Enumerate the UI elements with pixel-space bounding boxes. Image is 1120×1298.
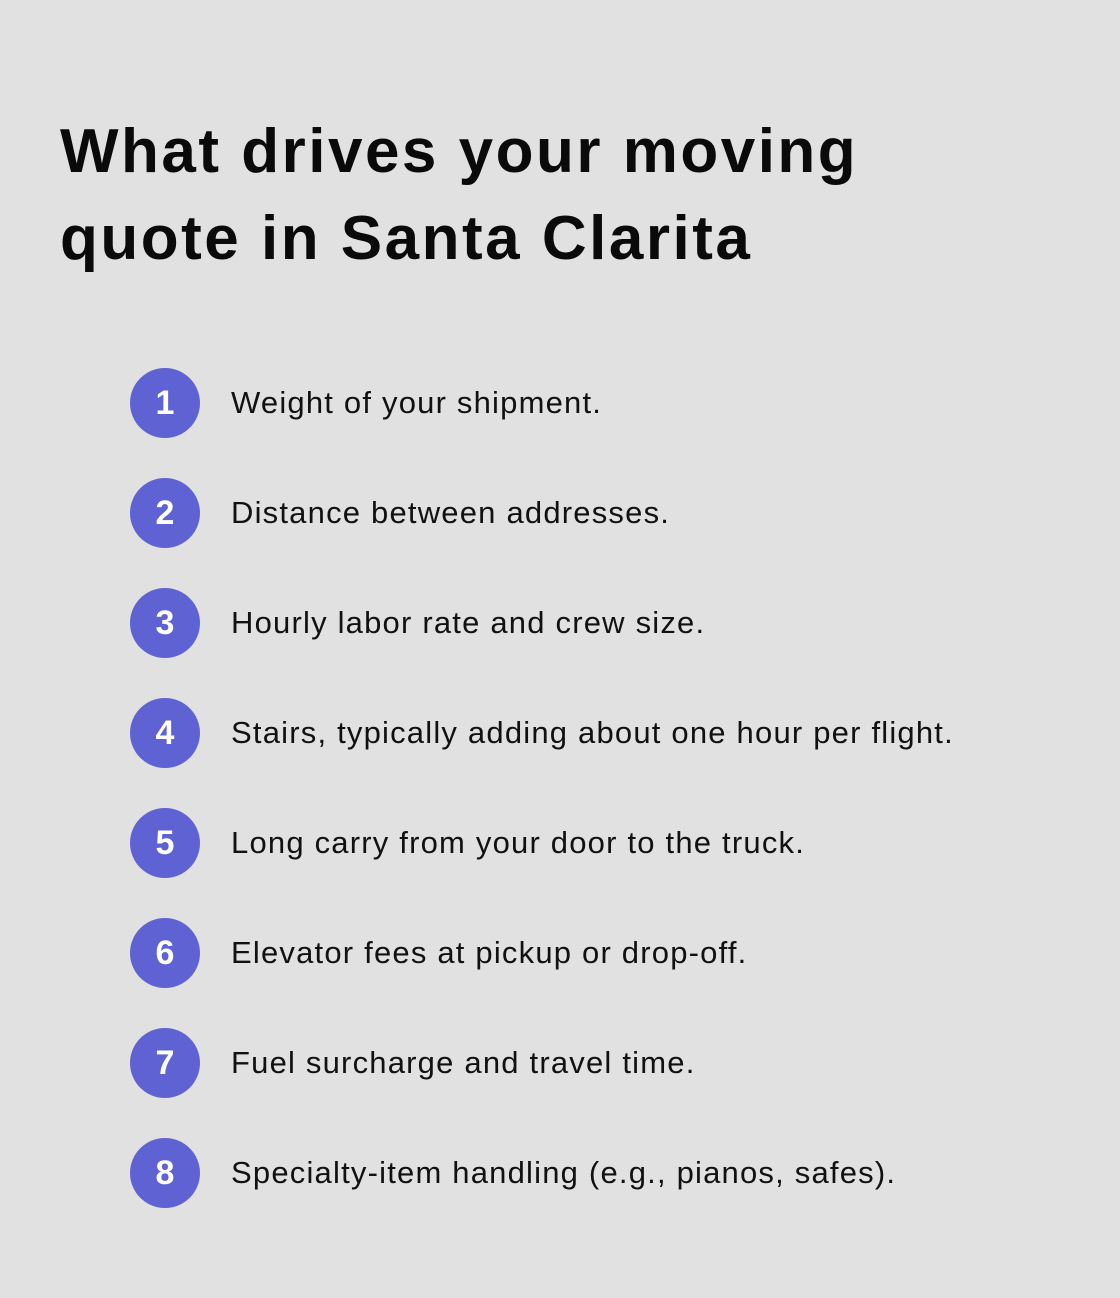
item 1: Weight of your shipment. bbox=[231, 385, 602, 420]
item 1 bbox=[130, 368, 602, 438]
item 4: 4 bbox=[156, 714, 174, 752]
item 5 bbox=[130, 808, 805, 878]
item 6 bbox=[130, 918, 748, 988]
item 8: Specialty-item handling (e.g., pianos, safes). bbox=[231, 1155, 896, 1190]
item 5: Long carry from your door to the truck. bbox=[231, 825, 805, 860]
item 2 bbox=[130, 478, 670, 548]
item 4: Stairs, typically adding about one hour per flight. bbox=[231, 715, 954, 750]
item 6: Elevator fees at pickup or drop-off. bbox=[231, 935, 748, 970]
item 3: 3 bbox=[156, 604, 174, 642]
title: quote in Santa Clarita bbox=[60, 204, 752, 273]
item 2: Distance between addresses. bbox=[231, 495, 670, 530]
item 8 bbox=[130, 1138, 896, 1208]
title bbox=[60, 117, 858, 273]
item 1: 1 bbox=[156, 384, 174, 422]
item 7: 7 bbox=[156, 1044, 174, 1082]
item 7: Fuel surcharge and travel time. bbox=[231, 1045, 696, 1080]
item 2: 2 bbox=[156, 494, 174, 532]
title: What drives your moving bbox=[60, 117, 858, 186]
item 7 bbox=[130, 1028, 696, 1098]
item 6: 6 bbox=[156, 934, 174, 972]
item 4 bbox=[130, 698, 954, 768]
list of factors bbox=[130, 368, 954, 1208]
item 5: 5 bbox=[156, 824, 174, 862]
item 8: 8 bbox=[156, 1154, 174, 1192]
item 3 bbox=[130, 588, 705, 658]
item 3: Hourly labor rate and crew size. bbox=[231, 605, 705, 640]
